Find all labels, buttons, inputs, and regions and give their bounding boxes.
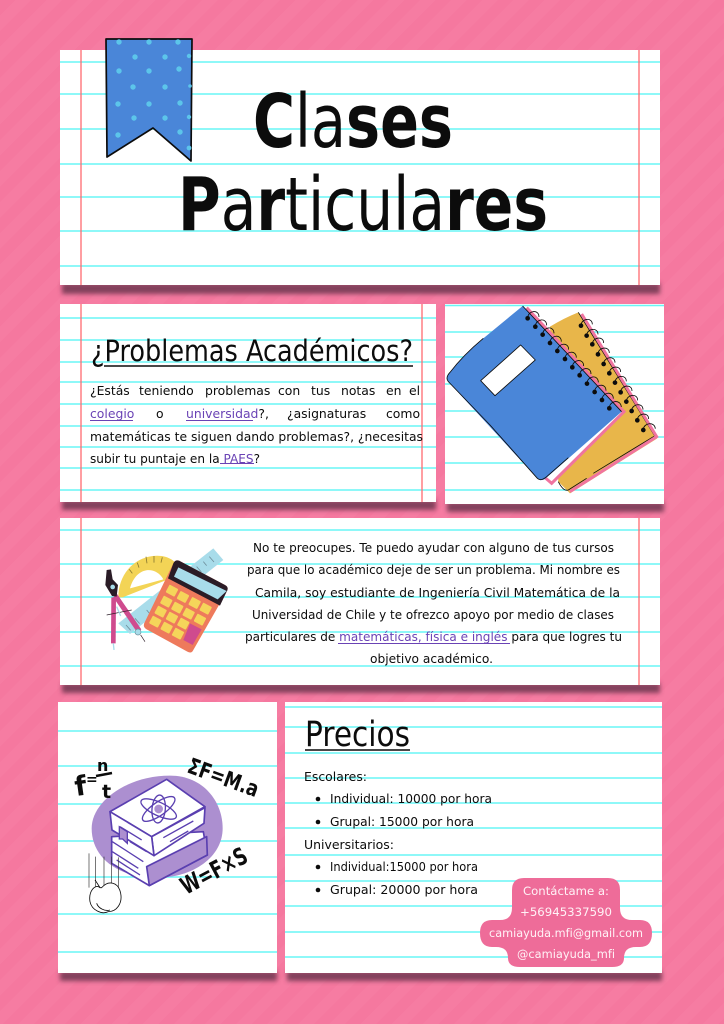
text block: como — [386, 406, 420, 421]
panel: física — [58, 702, 277, 981]
icon: falling apple — [89, 853, 121, 913]
icon: polka-dot bookmark — [106, 39, 192, 161]
formula: f = n / t: f — [73, 771, 89, 803]
icon: books with atom and formulas — [89, 776, 223, 913]
price list: Grupal: 15000 por hora — [330, 814, 474, 829]
text block: notas — [341, 383, 375, 398]
title: Clases — [253, 79, 453, 165]
text block: matemáticas te siguen dando problemas?, ¿necesitas — [90, 429, 423, 444]
price list: Individual:15000 por hora — [330, 859, 478, 874]
price list: Escolares: — [304, 769, 367, 784]
text block: en — [386, 383, 401, 398]
text block: objetivo académico. — [370, 651, 493, 666]
heading: Precios — [305, 715, 410, 755]
text block: para que lo académico deje de ser un problema. Mi nombre es — [247, 562, 620, 577]
text block: ¿Estás — [90, 383, 130, 398]
text block: con — [278, 383, 300, 398]
text block: Universidad de Chile y te ofrezco apoyo por medio de clases — [252, 607, 614, 622]
formula: f = n / t — [73, 756, 112, 803]
text block: teniendo — [139, 383, 194, 398]
callout: contact — [480, 878, 652, 967]
price list — [304, 769, 492, 897]
title: Particulares — [178, 162, 548, 248]
callout: contact: +56945337590 — [520, 905, 612, 919]
panel: title — [60, 39, 660, 294]
callout: contact: camiayuda.mfi@gmail.com — [489, 926, 643, 940]
text block: subir tu puntaje en la PAES? — [90, 451, 260, 466]
text block: ?, — [258, 406, 269, 421]
callout: contact: Contáctame a: — [523, 884, 609, 898]
panel: precios — [285, 702, 662, 981]
panel: problemas académicos — [60, 304, 436, 510]
price list: Grupal: 20000 por hora — [330, 882, 478, 897]
heading: ¿Problemas Académicos? — [91, 334, 413, 368]
panel: presentación — [60, 518, 660, 693]
callout: contact: @camiayuda_mfi — [517, 947, 615, 961]
icon: notebooks — [447, 306, 657, 493]
formula: sum of forces: ΣF=M.a — [184, 754, 262, 803]
text block — [245, 540, 622, 666]
text block: tus — [311, 383, 330, 398]
formula: f = n / t: = — [86, 772, 98, 788]
text block — [90, 383, 423, 466]
text block: o — [156, 406, 164, 421]
formula: f = n / t: n — [97, 756, 108, 775]
text block: problemas — [205, 383, 270, 398]
price list: Individual: 10000 por hora — [330, 791, 492, 806]
text block: universidad — [186, 406, 258, 421]
price list: Universitarios: — [304, 837, 394, 852]
icon: calculator and math tools — [105, 548, 228, 653]
title — [178, 79, 548, 248]
text block: colegio — [90, 406, 134, 421]
text block: No te preocupes. Te puedo ayudar con alguno de tus cursos — [253, 540, 614, 555]
formula: f = n / t: t — [102, 781, 111, 803]
text block: Camila, soy estudiante de Ingeniería Civil Matemática de la — [255, 585, 620, 600]
formula: work: W=F×S — [176, 842, 252, 900]
text block: ¿asignaturas — [287, 406, 366, 421]
text block: particulares de matemáticas, física e inglés para que logres tu — [245, 629, 622, 644]
text block: el — [409, 383, 420, 398]
panel: notebooks — [445, 304, 664, 512]
